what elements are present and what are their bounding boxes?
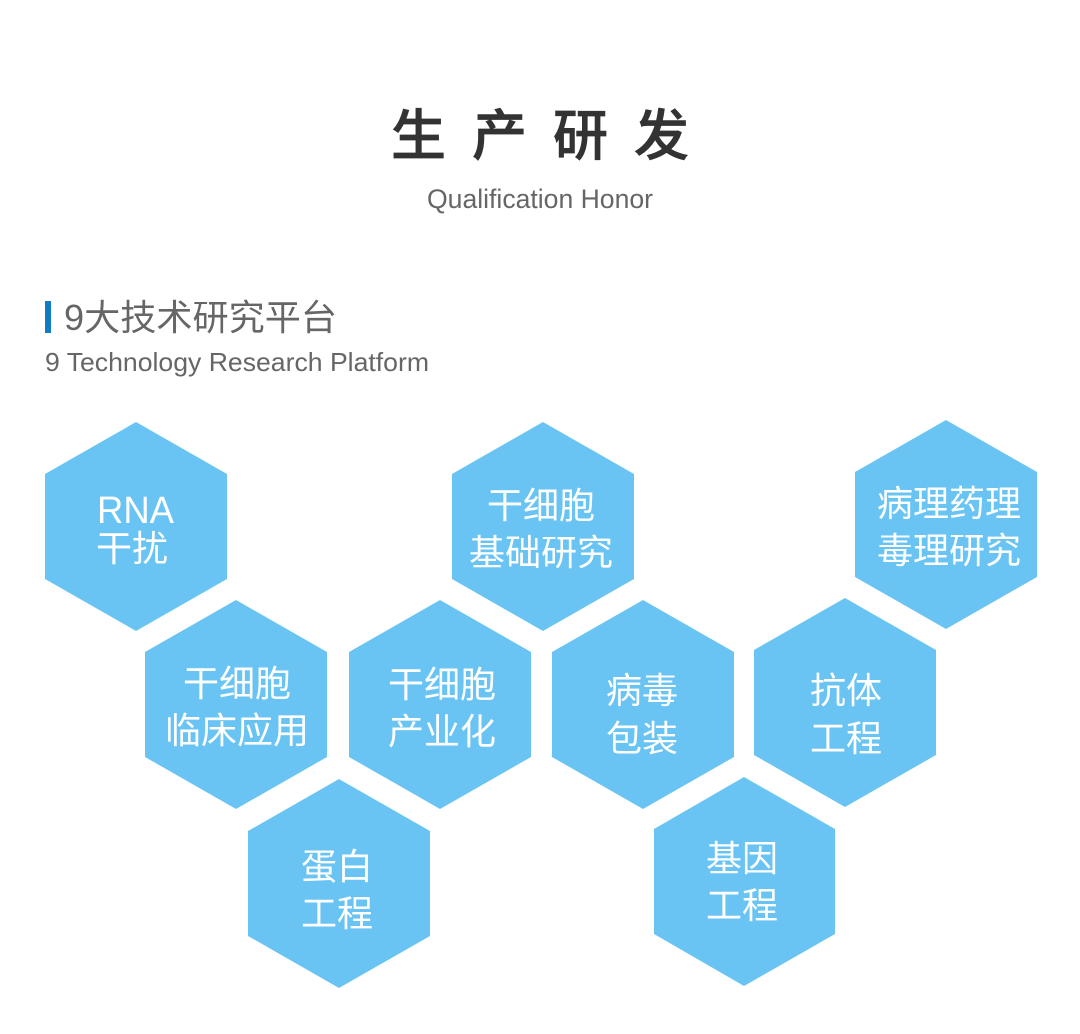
hexagon: virus packaging bbox=[552, 600, 734, 809]
hexagon: virus packaging: 包装 bbox=[606, 718, 678, 759]
subtitle: Qualification Honor bbox=[427, 184, 653, 214]
hexagon: protein engineering bbox=[248, 779, 430, 988]
hexagon: stem cell industrialization bbox=[349, 600, 531, 809]
hexagon: stem cell basic research: 干细胞 bbox=[487, 485, 595, 526]
hexagon: stem cell industrialization: 产业化 bbox=[388, 711, 496, 752]
hexagon: RNA interference bbox=[45, 422, 227, 631]
hexagon: stem cell basic research bbox=[452, 422, 634, 631]
title: 生产研发 bbox=[391, 105, 689, 167]
hexagon: stem cell clinical application: 临床应用 bbox=[165, 710, 309, 751]
hexagon: antibody engineering: 抗体 bbox=[810, 670, 882, 711]
hexagon: antibody engineering: 工程 bbox=[810, 718, 882, 759]
hexagon: RNA interference: RNA bbox=[97, 490, 175, 532]
hexagon: gene engineering bbox=[654, 777, 835, 986]
hexagon: virus packaging: 病毒 bbox=[606, 670, 678, 711]
hexagon: protein engineering: 工程 bbox=[301, 893, 373, 934]
hexagon: pathology and toxicology: 病理药理 bbox=[877, 483, 1021, 524]
hexagon: stem cell basic research: 基础研究 bbox=[469, 532, 613, 573]
hexagon: stem cell clinical application: 干细胞 bbox=[183, 663, 291, 704]
hexagon: stem cell clinical application bbox=[145, 600, 327, 809]
hexagon: pathology and toxicology: 毒理研究 bbox=[877, 530, 1021, 571]
hexagon: RNA interference: 干扰 bbox=[96, 528, 168, 569]
section subheading: 9 Technology Research Platform bbox=[45, 347, 429, 377]
hexagon: protein engineering: 蛋白 bbox=[301, 846, 373, 887]
hexagon: antibody engineering bbox=[754, 598, 936, 807]
hexagon: gene engineering: 工程 bbox=[706, 885, 778, 926]
hexagon: gene engineering: 基因 bbox=[706, 838, 778, 879]
hexagon: pathology and toxicology bbox=[855, 420, 1037, 629]
hexagon: stem cell industrialization: 干细胞 bbox=[388, 664, 496, 705]
section heading: 9大技术研究平台 bbox=[64, 297, 337, 338]
section marker bbox=[45, 301, 51, 333]
